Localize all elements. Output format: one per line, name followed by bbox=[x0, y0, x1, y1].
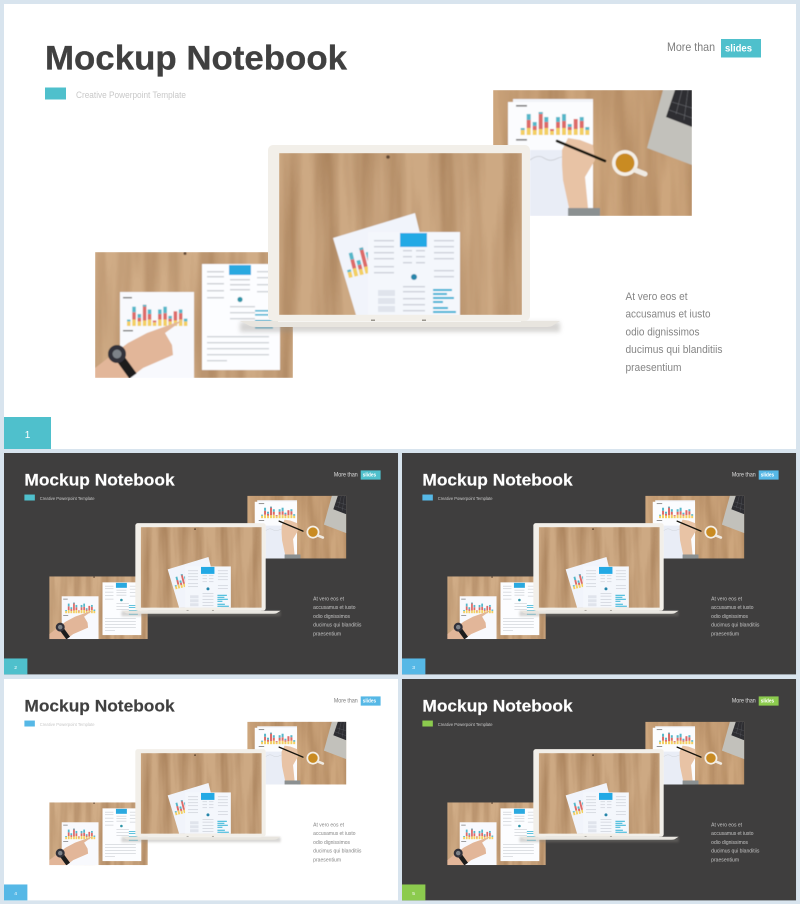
body text: praesentium bbox=[711, 632, 739, 638]
body text: At vero eos et bbox=[313, 822, 344, 828]
page number tab bbox=[4, 658, 27, 674]
body text: accusamus et iusto bbox=[711, 605, 753, 611]
more than label: More than bbox=[334, 698, 358, 704]
title: Mockup Notebook bbox=[24, 471, 175, 490]
body text: praesentium bbox=[626, 362, 682, 374]
body text: ducimus qui blanditiis bbox=[313, 849, 362, 855]
body text: accusamus et iusto bbox=[711, 831, 753, 837]
body text: odio dignissimos bbox=[626, 326, 700, 338]
body text: ducimus qui blanditiis bbox=[313, 623, 362, 629]
slides badge bbox=[361, 696, 381, 706]
photo: hand drawing on chart bbox=[493, 90, 692, 216]
title: Mockup Notebook bbox=[45, 40, 347, 78]
laptop mockup bbox=[240, 145, 560, 332]
slides badge bbox=[759, 696, 779, 706]
subtitle: Creative Powerpoint Template bbox=[40, 722, 95, 727]
body text: odio dignissimos bbox=[313, 614, 350, 620]
body text: accusamus et iusto bbox=[313, 831, 355, 837]
body text: At vero eos et bbox=[711, 596, 742, 602]
page number tab: 4 bbox=[14, 891, 17, 897]
panel: slide 3 dark blue bbox=[402, 453, 796, 674]
panel: slide 5 dark green bbox=[402, 679, 796, 900]
subtitle swatch bbox=[422, 495, 433, 501]
photo: hand drawing on chart bbox=[247, 722, 346, 784]
photo: hand drawing on chart bbox=[247, 496, 346, 558]
subtitle: Creative Powerpoint Template bbox=[438, 496, 493, 501]
subtitle swatch bbox=[45, 88, 66, 100]
slides badge: slides bbox=[725, 42, 752, 54]
slides badge bbox=[759, 470, 779, 480]
panel: slide 2 dark teal bbox=[4, 453, 398, 674]
body text bbox=[711, 596, 760, 638]
laptop mockup bbox=[121, 523, 281, 616]
page number tab: 3 bbox=[412, 665, 415, 671]
subtitle swatch bbox=[24, 721, 35, 727]
body text: praesentium bbox=[313, 632, 341, 638]
slides badge: slides bbox=[363, 699, 376, 705]
panel: slide 1 white bbox=[4, 4, 796, 449]
page number tab: 5 bbox=[412, 891, 415, 897]
subtitle swatch bbox=[24, 495, 35, 501]
photo: hand pointing at chart bbox=[447, 576, 546, 639]
body text: At vero eos et bbox=[711, 822, 742, 828]
body text: ducimus qui blanditiis bbox=[711, 623, 760, 629]
subtitle: Creative Powerpoint Template bbox=[40, 496, 95, 501]
photo: hand drawing on chart bbox=[645, 722, 744, 784]
more than label: More than bbox=[732, 698, 756, 704]
slides badge bbox=[721, 39, 761, 58]
body text: praesentium bbox=[313, 858, 341, 864]
photo: hand pointing at chart bbox=[49, 802, 148, 865]
body text: ducimus qui blanditiis bbox=[626, 344, 723, 356]
body text: At vero eos et bbox=[626, 291, 688, 303]
body text bbox=[313, 822, 362, 864]
page number tab bbox=[402, 884, 425, 900]
subtitle: Creative Powerpoint Template bbox=[76, 90, 186, 100]
slides badge bbox=[361, 470, 381, 480]
laptop mockup bbox=[519, 523, 679, 616]
slides badge: slides bbox=[363, 473, 376, 479]
page number tab bbox=[4, 417, 51, 449]
laptop mockup bbox=[519, 749, 679, 842]
body text: ducimus qui blanditiis bbox=[711, 849, 760, 855]
slides badge: slides bbox=[761, 473, 774, 479]
title: Mockup Notebook bbox=[422, 697, 573, 716]
more than label: More than bbox=[334, 472, 358, 478]
photo: hand pointing at chart bbox=[49, 576, 148, 639]
body text: odio dignissimos bbox=[711, 614, 748, 620]
body text bbox=[711, 822, 760, 864]
page number tab: 2 bbox=[14, 665, 17, 671]
photo: hand drawing on chart bbox=[645, 496, 744, 558]
laptop mockup bbox=[121, 749, 281, 842]
more than label: More than bbox=[667, 40, 715, 54]
page number tab bbox=[402, 658, 425, 674]
body text: At vero eos et bbox=[313, 596, 344, 602]
panel: slide 4 white blue bbox=[4, 679, 398, 900]
photo: hand pointing at chart bbox=[95, 252, 293, 378]
title: Mockup Notebook bbox=[24, 697, 175, 716]
body text: accusamus et iusto bbox=[626, 308, 710, 320]
body text: odio dignissimos bbox=[711, 840, 748, 846]
body text bbox=[626, 291, 723, 374]
title: Mockup Notebook bbox=[422, 471, 573, 490]
body text: odio dignissimos bbox=[313, 840, 350, 846]
slides badge: slides bbox=[761, 699, 774, 705]
subtitle swatch bbox=[422, 721, 433, 727]
page number tab bbox=[4, 884, 27, 900]
page number tab: 1 bbox=[25, 430, 31, 441]
body text bbox=[313, 596, 362, 638]
subtitle: Creative Powerpoint Template bbox=[438, 722, 493, 727]
more than label: More than bbox=[732, 472, 756, 478]
photo: hand pointing at chart bbox=[447, 802, 546, 865]
body text: accusamus et iusto bbox=[313, 605, 355, 611]
body text: praesentium bbox=[711, 858, 739, 864]
